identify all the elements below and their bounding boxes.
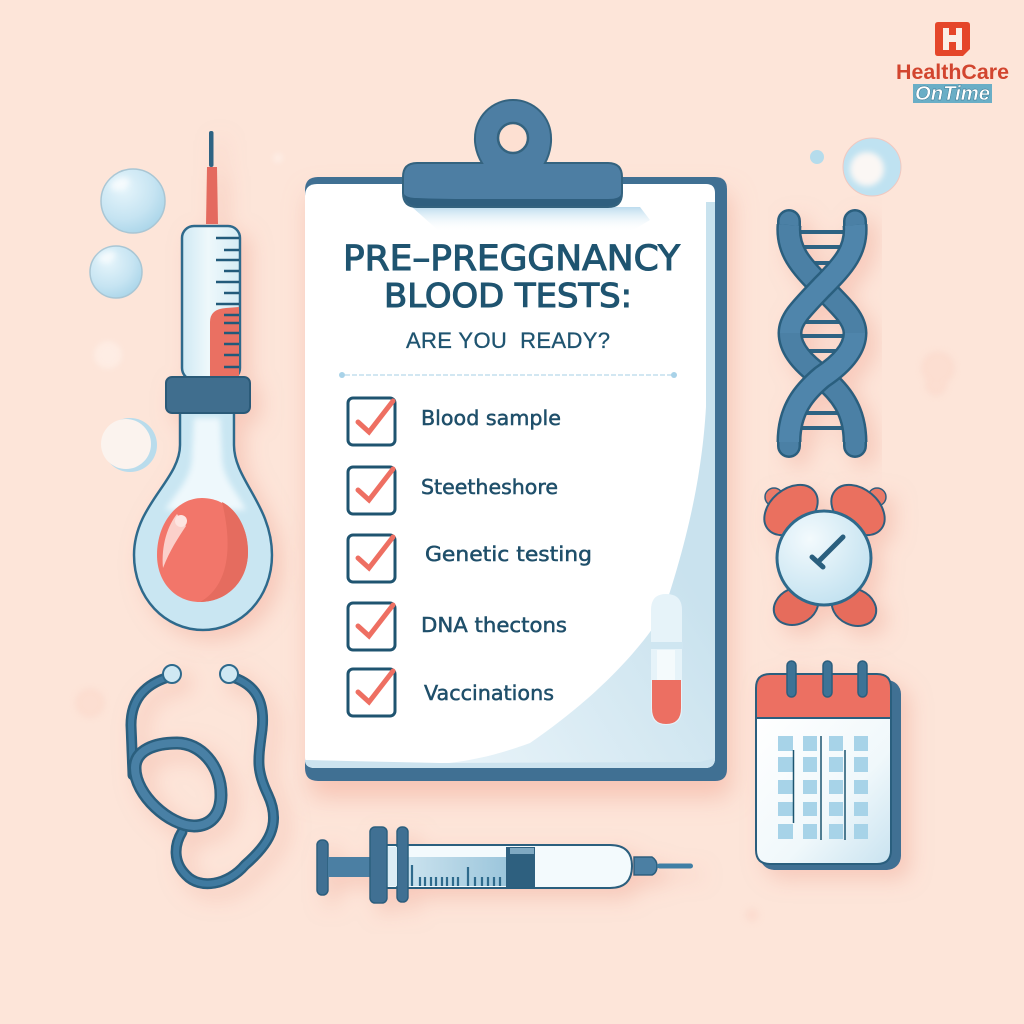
icon: stethoscope [131, 665, 274, 884]
calendar back [760, 680, 901, 870]
clock face [777, 511, 871, 605]
logo badge [935, 22, 970, 56]
liquid [390, 857, 506, 886]
DNA rungs [796, 232, 848, 428]
paper corner shade [305, 380, 715, 768]
icon: blood syringe with bulb [134, 131, 272, 630]
paper [305, 184, 715, 768]
icon: DNA helix [789, 221, 855, 446]
logo H [943, 28, 962, 50]
barrel [386, 845, 632, 888]
checklist item 4: DNA thectons [421, 613, 567, 637]
drop shade [200, 502, 248, 602]
DNA lower strands [789, 225, 855, 442]
logo [896, 22, 1009, 105]
heading: BLOOD TESTS: [384, 276, 632, 315]
stethoscope loop [135, 743, 221, 826]
calendar rings [787, 661, 867, 697]
clock feet [768, 580, 824, 632]
bubble: pale lower left [101, 418, 157, 472]
subheading: ARE YOU READY? [406, 328, 610, 353]
checklist item 1 [348, 398, 561, 445]
checklist item 2 [348, 467, 558, 514]
decorative faint bubbles [75, 153, 955, 922]
barrel front over flange [388, 847, 397, 886]
plunger end [317, 840, 328, 895]
bubble: middle left [90, 246, 142, 298]
panel: clipboard [305, 100, 727, 781]
icon: alarm clock [755, 475, 894, 633]
DNA tips [789, 221, 855, 446]
paper right edge [706, 202, 715, 442]
heading: PRE–PREGGNANCY [343, 239, 681, 279]
checklist item 5: Vaccinations [424, 681, 554, 705]
bubble: top right large [843, 138, 901, 196]
clip shadow on paper [412, 207, 650, 232]
needle [657, 864, 693, 868]
checklist item 4 [348, 603, 567, 650]
heading [343, 239, 681, 315]
clipboard board [305, 177, 727, 781]
blood in barrel [210, 307, 239, 376]
needle hub [206, 167, 218, 224]
icon: test tube on paper [651, 594, 683, 725]
icon: horizontal syringe [317, 827, 693, 903]
calendar vertical lines [794, 736, 845, 840]
logo wordmark: HealthCare [896, 61, 1009, 84]
calendar page [756, 718, 891, 864]
DNA upper strands [789, 225, 855, 442]
needle [209, 131, 214, 167]
hub [634, 857, 657, 875]
glass bulb [134, 410, 272, 630]
barrel ticks [394, 865, 500, 886]
dotted divider [339, 372, 677, 378]
checklist item 3: Genetic testing [425, 542, 592, 566]
barrel ticks [216, 238, 239, 367]
drop highlight dot [175, 515, 187, 527]
clock knobs [765, 488, 783, 506]
logo tagline bar [913, 84, 992, 103]
clock bells [755, 475, 827, 545]
checklist item 2: Steetheshore [421, 475, 558, 499]
drop highlight [163, 514, 186, 568]
calendar header [756, 674, 891, 718]
dark band [506, 847, 535, 887]
bubble: top left [101, 169, 165, 233]
band highlight [510, 848, 534, 854]
icon: calendar [756, 661, 901, 870]
plunger rod [328, 857, 372, 877]
collar [166, 377, 250, 413]
barrel [182, 226, 240, 380]
rear flange [370, 827, 387, 903]
blood drop [157, 498, 248, 602]
calendar date grid [778, 736, 868, 839]
stethoscope earpieces [163, 665, 181, 683]
checklist item 5 [348, 669, 554, 716]
stethoscope tube [131, 676, 274, 884]
paper bottom edge [305, 758, 715, 768]
front flange [397, 827, 408, 902]
bulb highlight [165, 418, 246, 510]
logo tagline: OnTime [915, 83, 990, 105]
bubble: top right small [810, 150, 824, 164]
clip [403, 100, 622, 207]
clock hands [812, 537, 843, 567]
checklist item 3 [348, 535, 592, 582]
checklist item 1: Blood sample [421, 406, 561, 430]
